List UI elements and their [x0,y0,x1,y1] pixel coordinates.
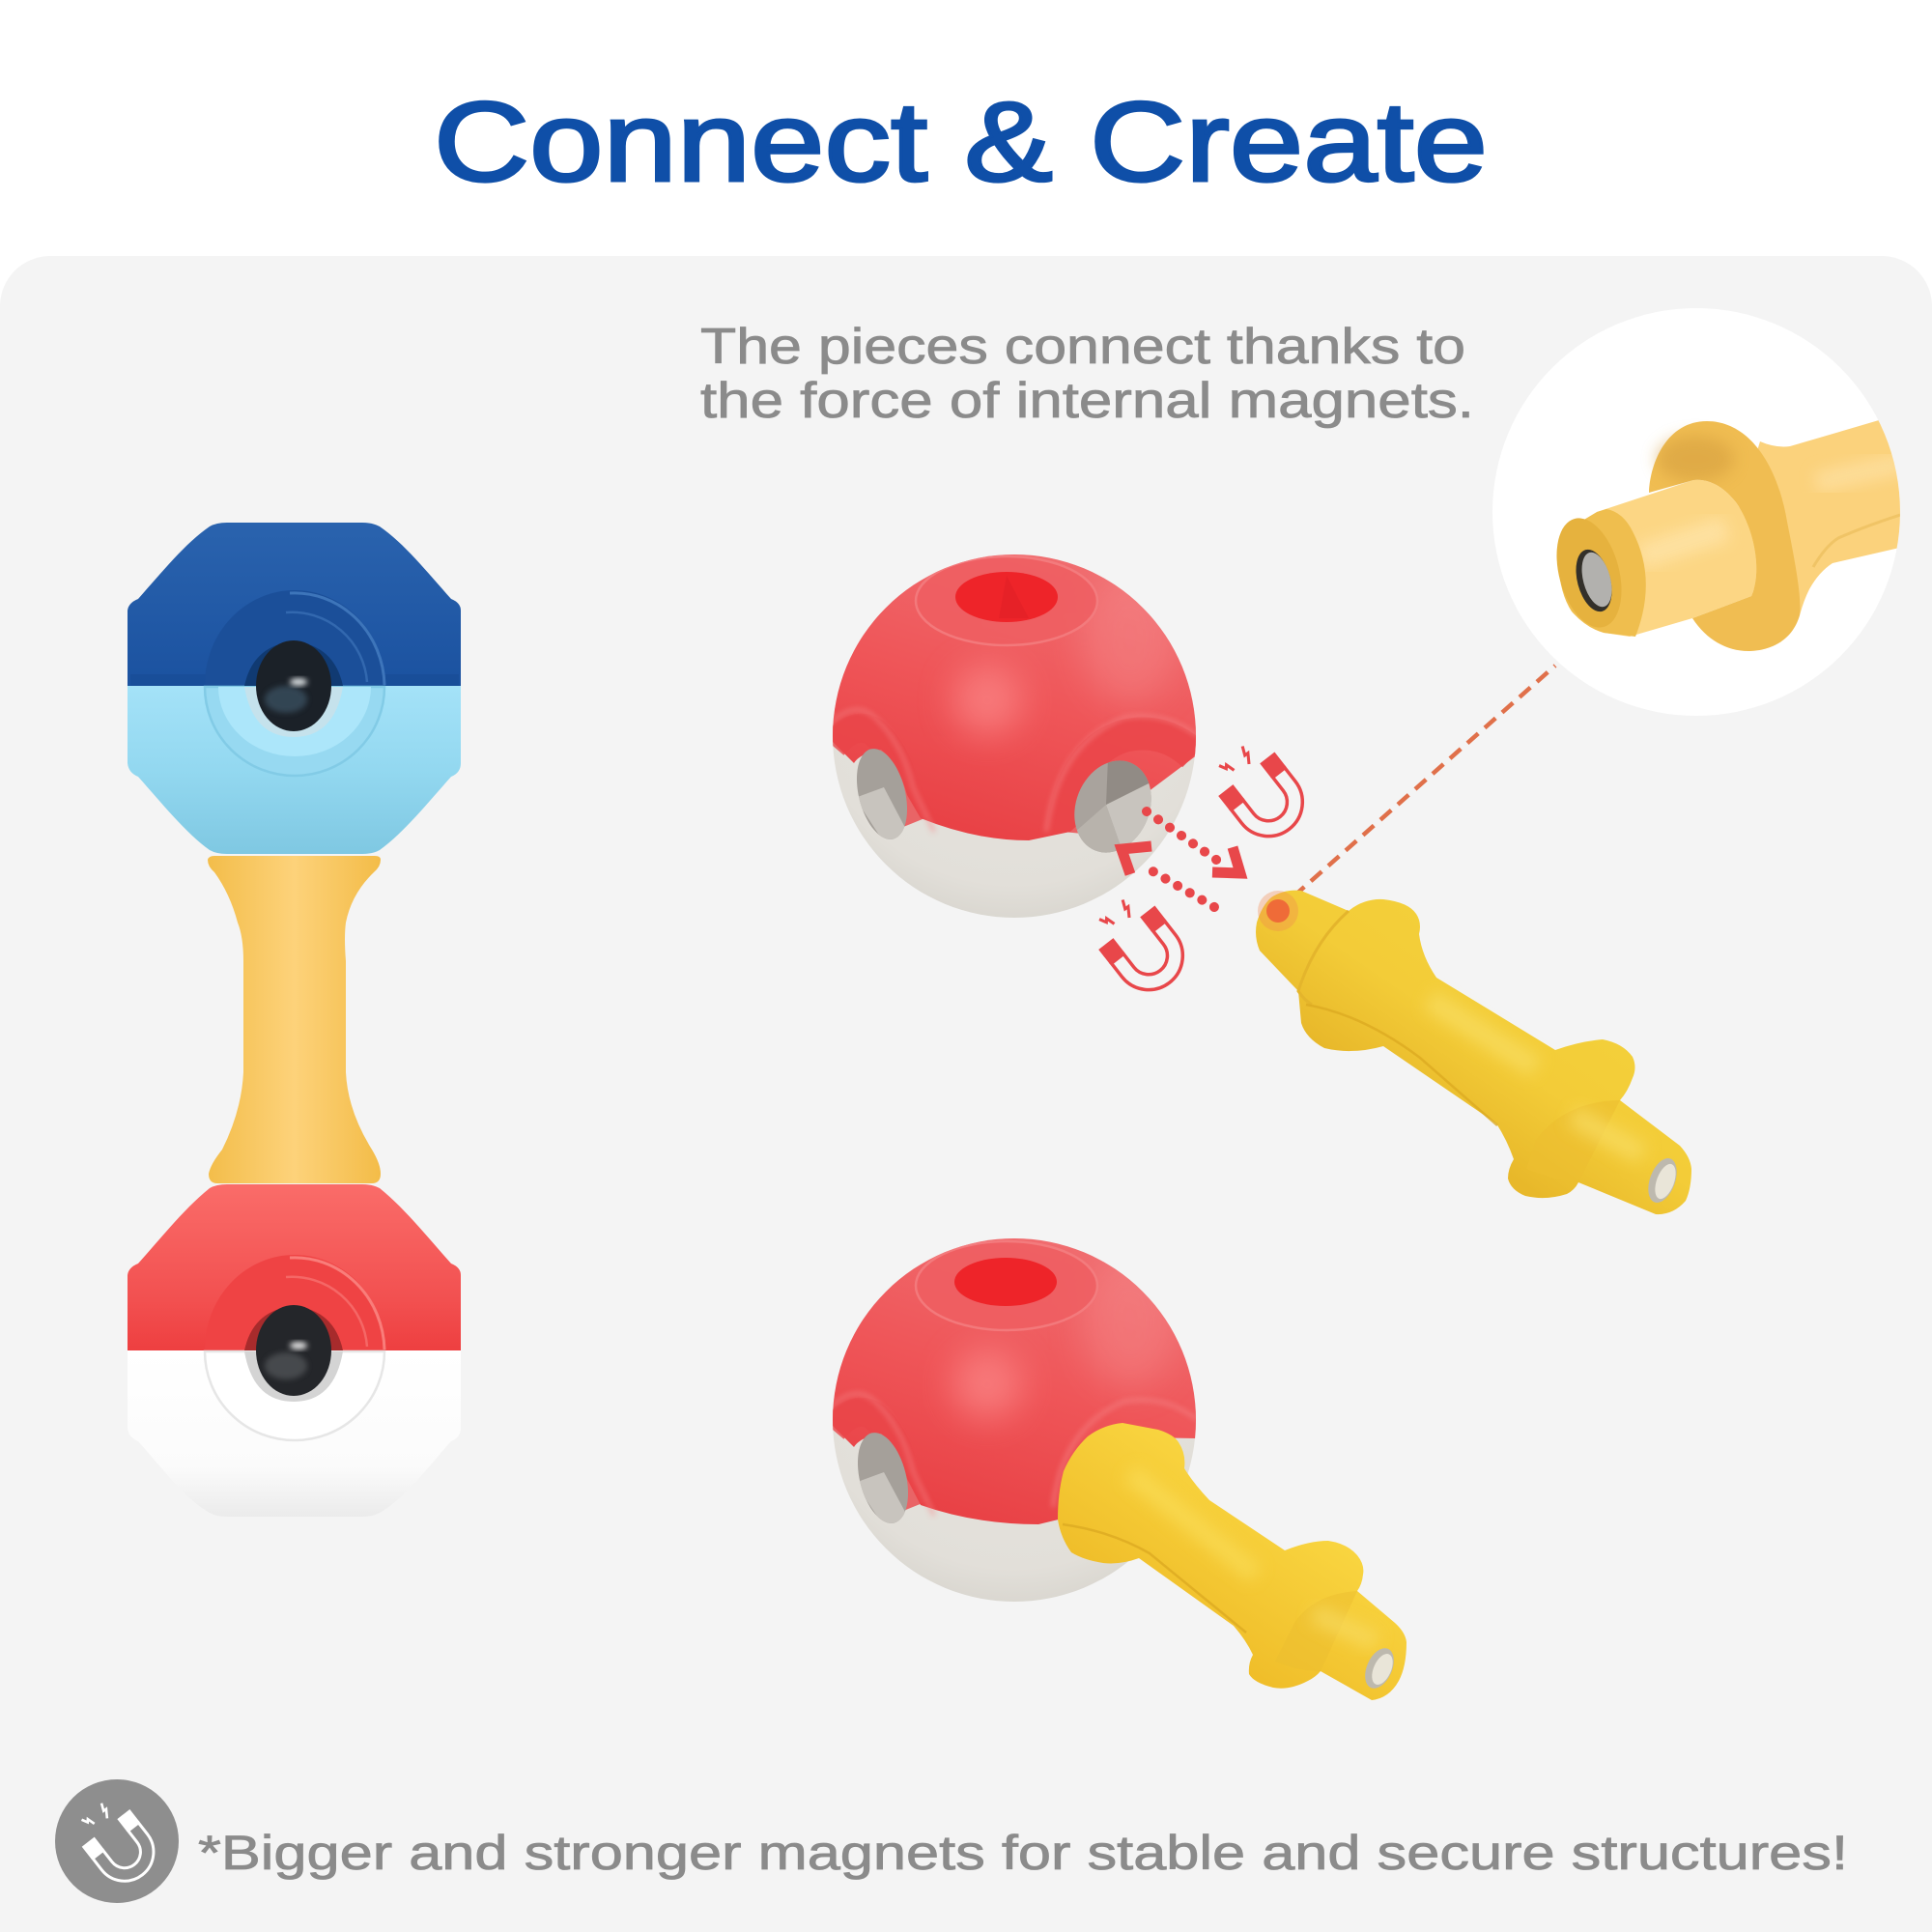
zoom circle: magnet end detail [1492,308,1908,716]
top collar [916,556,1097,645]
rod body closeup [1739,420,1900,642]
ball piece with holes (separated) [821,541,1208,918]
left side hole [857,749,907,839]
top collar [916,1241,1097,1330]
arch around left hole [833,728,918,821]
top hole [954,1258,1057,1306]
red upper shell [833,1238,1196,1524]
black magnet ball [256,1305,331,1396]
arch around right hole [1063,734,1194,832]
footnote: *Bigger and stronger magnets for stable and secure structures! [198,1826,1848,1880]
magnet attraction arrows [1122,811,1240,907]
socket [244,641,343,686]
text block: magnet explanation [700,319,1474,429]
text block: magnet explanation: The pieces connect thanks to [700,319,1465,375]
bottom red sphere piece [128,1184,461,1517]
attention dot [1258,891,1298,931]
chamfer [1558,509,1646,637]
inserted yellow rod [1058,1423,1406,1700]
assembled ball and rod [821,1225,1406,1700]
text block: magnet explanation: the force of internal magnets. [700,373,1474,429]
magnet disc [1359,1644,1400,1692]
yellow rod piece (separated) [1256,891,1691,1214]
right side hole [1074,760,1151,853]
dotted arrow toward rod [1147,811,1240,873]
top hole [955,572,1058,622]
icon: magnet badge [55,1779,179,1903]
cylinder [1597,480,1756,637]
icon: red magnet lower [1083,886,1198,1005]
black magnet ball [256,640,331,731]
icon: red magnet upper [1203,732,1318,851]
yellow connector rod [208,856,381,1183]
red upper shell [833,554,1196,840]
assembled dumbbell toy [128,523,461,1517]
magnet disc [1577,549,1611,612]
magnet disc [1643,1154,1682,1207]
top blue sphere piece [128,523,461,854]
left side hole [858,1433,908,1523]
socket [244,1306,343,1350]
title: Connect & Create [434,78,1488,205]
flange ring [1649,421,1800,651]
dotted arrow toward ball [1122,846,1214,907]
dashed leader line [1293,666,1555,896]
